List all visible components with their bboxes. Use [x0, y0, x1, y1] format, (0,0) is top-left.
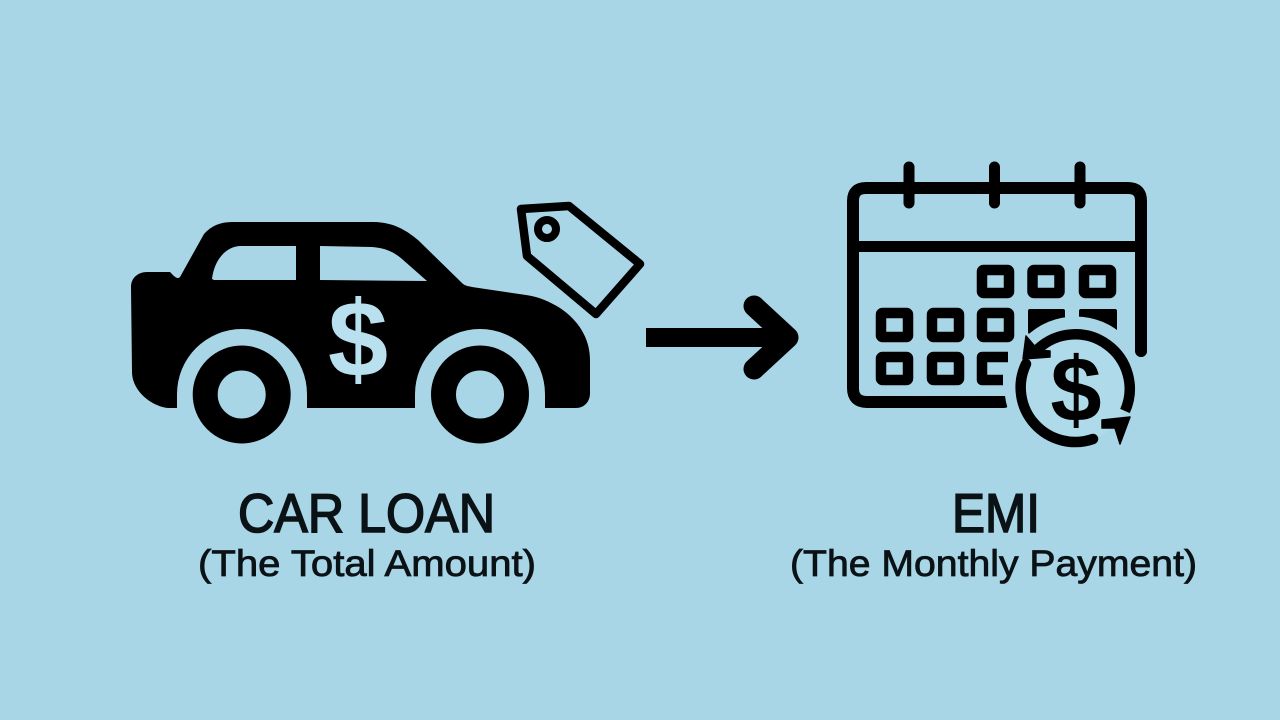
icon: price tag	[521, 206, 640, 314]
calendar frame	[853, 188, 1141, 402]
front wheel	[444, 358, 516, 431]
recurring payment badge	[1004, 316, 1146, 458]
calendar binder rings	[909, 167, 1080, 203]
label: car loan subtitle: (The Total Amount)	[198, 543, 536, 584]
recurring payment badge: $	[1050, 339, 1102, 441]
calendar day cells	[881, 270, 1117, 380]
label: EMI heading: EMI	[952, 482, 1040, 544]
car body	[131, 222, 590, 408]
arrow	[646, 306, 788, 369]
rear wheel	[205, 358, 278, 431]
icon: car with dollar sign	[131, 222, 590, 431]
icon: calendar with recurring payment	[853, 167, 1146, 458]
dollar sign on car: $	[328, 278, 388, 399]
calendar header line	[853, 241, 1141, 252]
label: car loan heading: CAR LOAN	[238, 482, 495, 544]
label: EMI subtitle: (The Monthly Payment)	[790, 543, 1197, 584]
